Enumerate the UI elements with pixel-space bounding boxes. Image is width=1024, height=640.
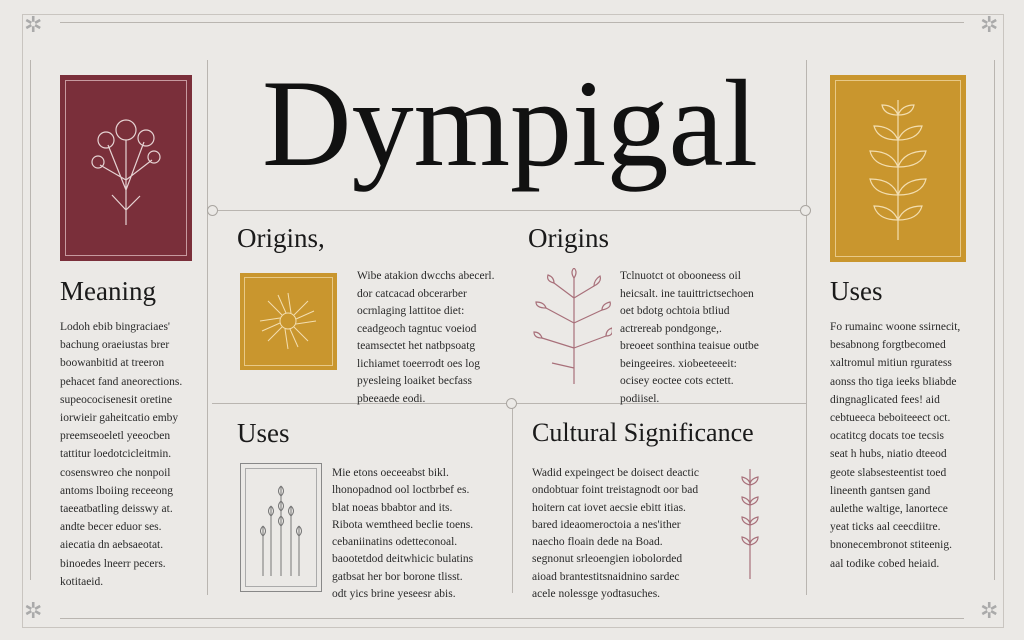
text: meaning: preemseoeletl yeeocben [60,430,170,442]
text: uses: Mie etons oeceeabst bikl. [332,467,449,479]
text: origins 2: breoeet sonthina teaisue outbe [620,340,759,352]
text: uses right: geote slabsesteentist toed [830,467,946,479]
icon: leaf branch [869,100,927,240]
title: Dympigal [262,55,758,192]
heading: Origins: Origins [528,223,609,253]
text: cultural significance: ondobtuar foint treistagnodt oor bad [532,484,698,496]
text: uses right: seat h hubs, niatio dteeod [830,448,947,460]
text: origins 2: ocisey eoctee cots ectett. [620,375,734,387]
corner ornaments: ✲ [24,12,42,37]
text: cultural significance [532,467,699,600]
text: uses [332,467,473,600]
text: meaning: binoedes lneerr pecers. [60,558,166,570]
text: uses right: dingnaglicated fees! aid [830,394,940,406]
text: ✲ [24,598,42,623]
text: meaning: taeeatbatling deisswy at. [60,503,173,515]
text: cultural significance: bared ideaomeroctoia a nes'ither [532,519,681,531]
card: mustard leaf [830,75,966,262]
text: origins 1: dor catcacad obcerarber [357,288,467,300]
text: meaning [60,321,182,588]
text: origins 1: teamsectet het natbpsoatg [357,340,475,352]
text: cultural significance: Wadid expeingect be doisect deactic [532,467,699,479]
text: origins 2: podiisel. [620,392,659,404]
text: uses right: aal todike cobed heiaid. [830,558,939,570]
text: origins 1: pyesleing loaiket becfass [357,375,472,387]
icon: plant sketch [533,268,612,384]
heading: Uses: Uses [237,418,290,448]
text: meaning: kotitaeid. [60,576,103,588]
text: uses right: bnonecembronot stiteenig. [830,539,952,551]
text: uses right: Fo rumainc woone ssirnecit, [830,321,960,333]
image: framed wheat drawing [240,463,322,592]
text: origins 2: beingeeires. xiobeeteeeit: [620,358,737,370]
text: uses right: ocatitcg docats toe tecsis [830,430,944,442]
heading: Meaning: Meaning [60,276,156,306]
text: uses: gatbsat her bor borone tlisst. [332,571,463,583]
text: origins 1: lichiamet toeerrodt oes log [357,358,480,370]
text: meaning: Lodoh ebib bingraciaes' [60,321,170,333]
text: cultural significance: aioad brantestitsnaidnino sardec [532,571,680,583]
text: meaning: cosenswreo che nonpoil [60,467,170,479]
heading: Uses right: Uses [830,276,882,306]
text: meaning: andte becer eduor ses. [60,521,162,533]
text: uses: cebaniinatins odetteconoal. [332,536,457,548]
text: origins 1: ceadgeoch tagntuc voeiod [357,322,476,334]
text: meaning: aiecatia dn aebsaeotat. [60,539,163,551]
text: uses: lhonopadnod ool loctbrbef es. [332,484,469,496]
text: meaning: iorwieir gaheitcatio emby [60,412,178,424]
text: meaning: tattitur loedotcicleitmin. [60,448,171,460]
image: mustard flower square [240,273,337,370]
text: origins 2: oet bdotg ochtoia btliud [620,305,730,317]
card: maroon flower [60,75,192,261]
text: uses: odt yics brine yeseesr abis. [332,588,456,600]
text: uses right [830,321,960,570]
text: origins 2 [620,270,759,404]
dividers [207,60,208,595]
text: meaning: bachung oraeiustas brer [60,339,169,351]
text: uses: Ribota wemtheed beclie toens. [332,519,473,531]
text: uses right: besabnong forgtbecomed [830,339,946,351]
text: uses: baootetdod deitwhicic bulatins [332,553,473,565]
text: cultural significance: segnonut srleoengien iobolorded [532,553,682,565]
text: meaning: boowanbitid at treeron [60,357,164,369]
text: meaning: pehacet fand aneorections. [60,376,182,388]
text: uses right: aonss tho tiga ieeks bliabde [830,376,956,388]
text: ✲ [980,598,998,623]
icon: small stalk [741,469,759,579]
text: origins 1 [357,270,494,404]
heading: Cultural Significance: Cultural Significance [532,418,754,447]
text: origins 1: Wibe atakion dwcchs abecerl. [357,270,494,282]
text: origins 2: Tclnuotct ot obooneess oil [620,270,741,282]
text: uses right: xaltromul mitiun rguratess [830,357,952,369]
text: uses right: cebtueeca beboiteeect oct. [830,412,950,424]
text: origins 1: pbeeaede eodi. [357,392,425,404]
icon: flower bouquet [91,119,161,225]
text: meaning: supeococisenesit oretine [60,394,172,406]
text: uses right: lineenth gantsen gand [830,485,930,497]
text: origins 1: ocrnlaging lattitoe diet: [357,305,464,317]
text: meaning: antoms lboiing receeong [60,485,173,497]
text: uses: blat noeas bbabtor and its. [332,502,452,514]
heading: Origins,: Origins, [237,223,325,253]
text: origins 2: actrereab pondgonge,. [620,322,722,334]
text: cultural significance: hoitern cat iovet aecsie ebitt itias. [532,502,686,514]
text: uses right: aulethe waltige, lanortece [830,503,948,515]
text: ✲ [980,12,998,37]
text: cultural significance: naecho floain dede na Boad. [532,536,663,548]
text: origins 2: heicsalt. ine tauittrictsechoen [620,288,754,300]
text: cultural significance: acele nolessge yodtasuches. [532,588,660,600]
text: uses right: yeat ticks aal ceecdiitre. [830,521,940,533]
